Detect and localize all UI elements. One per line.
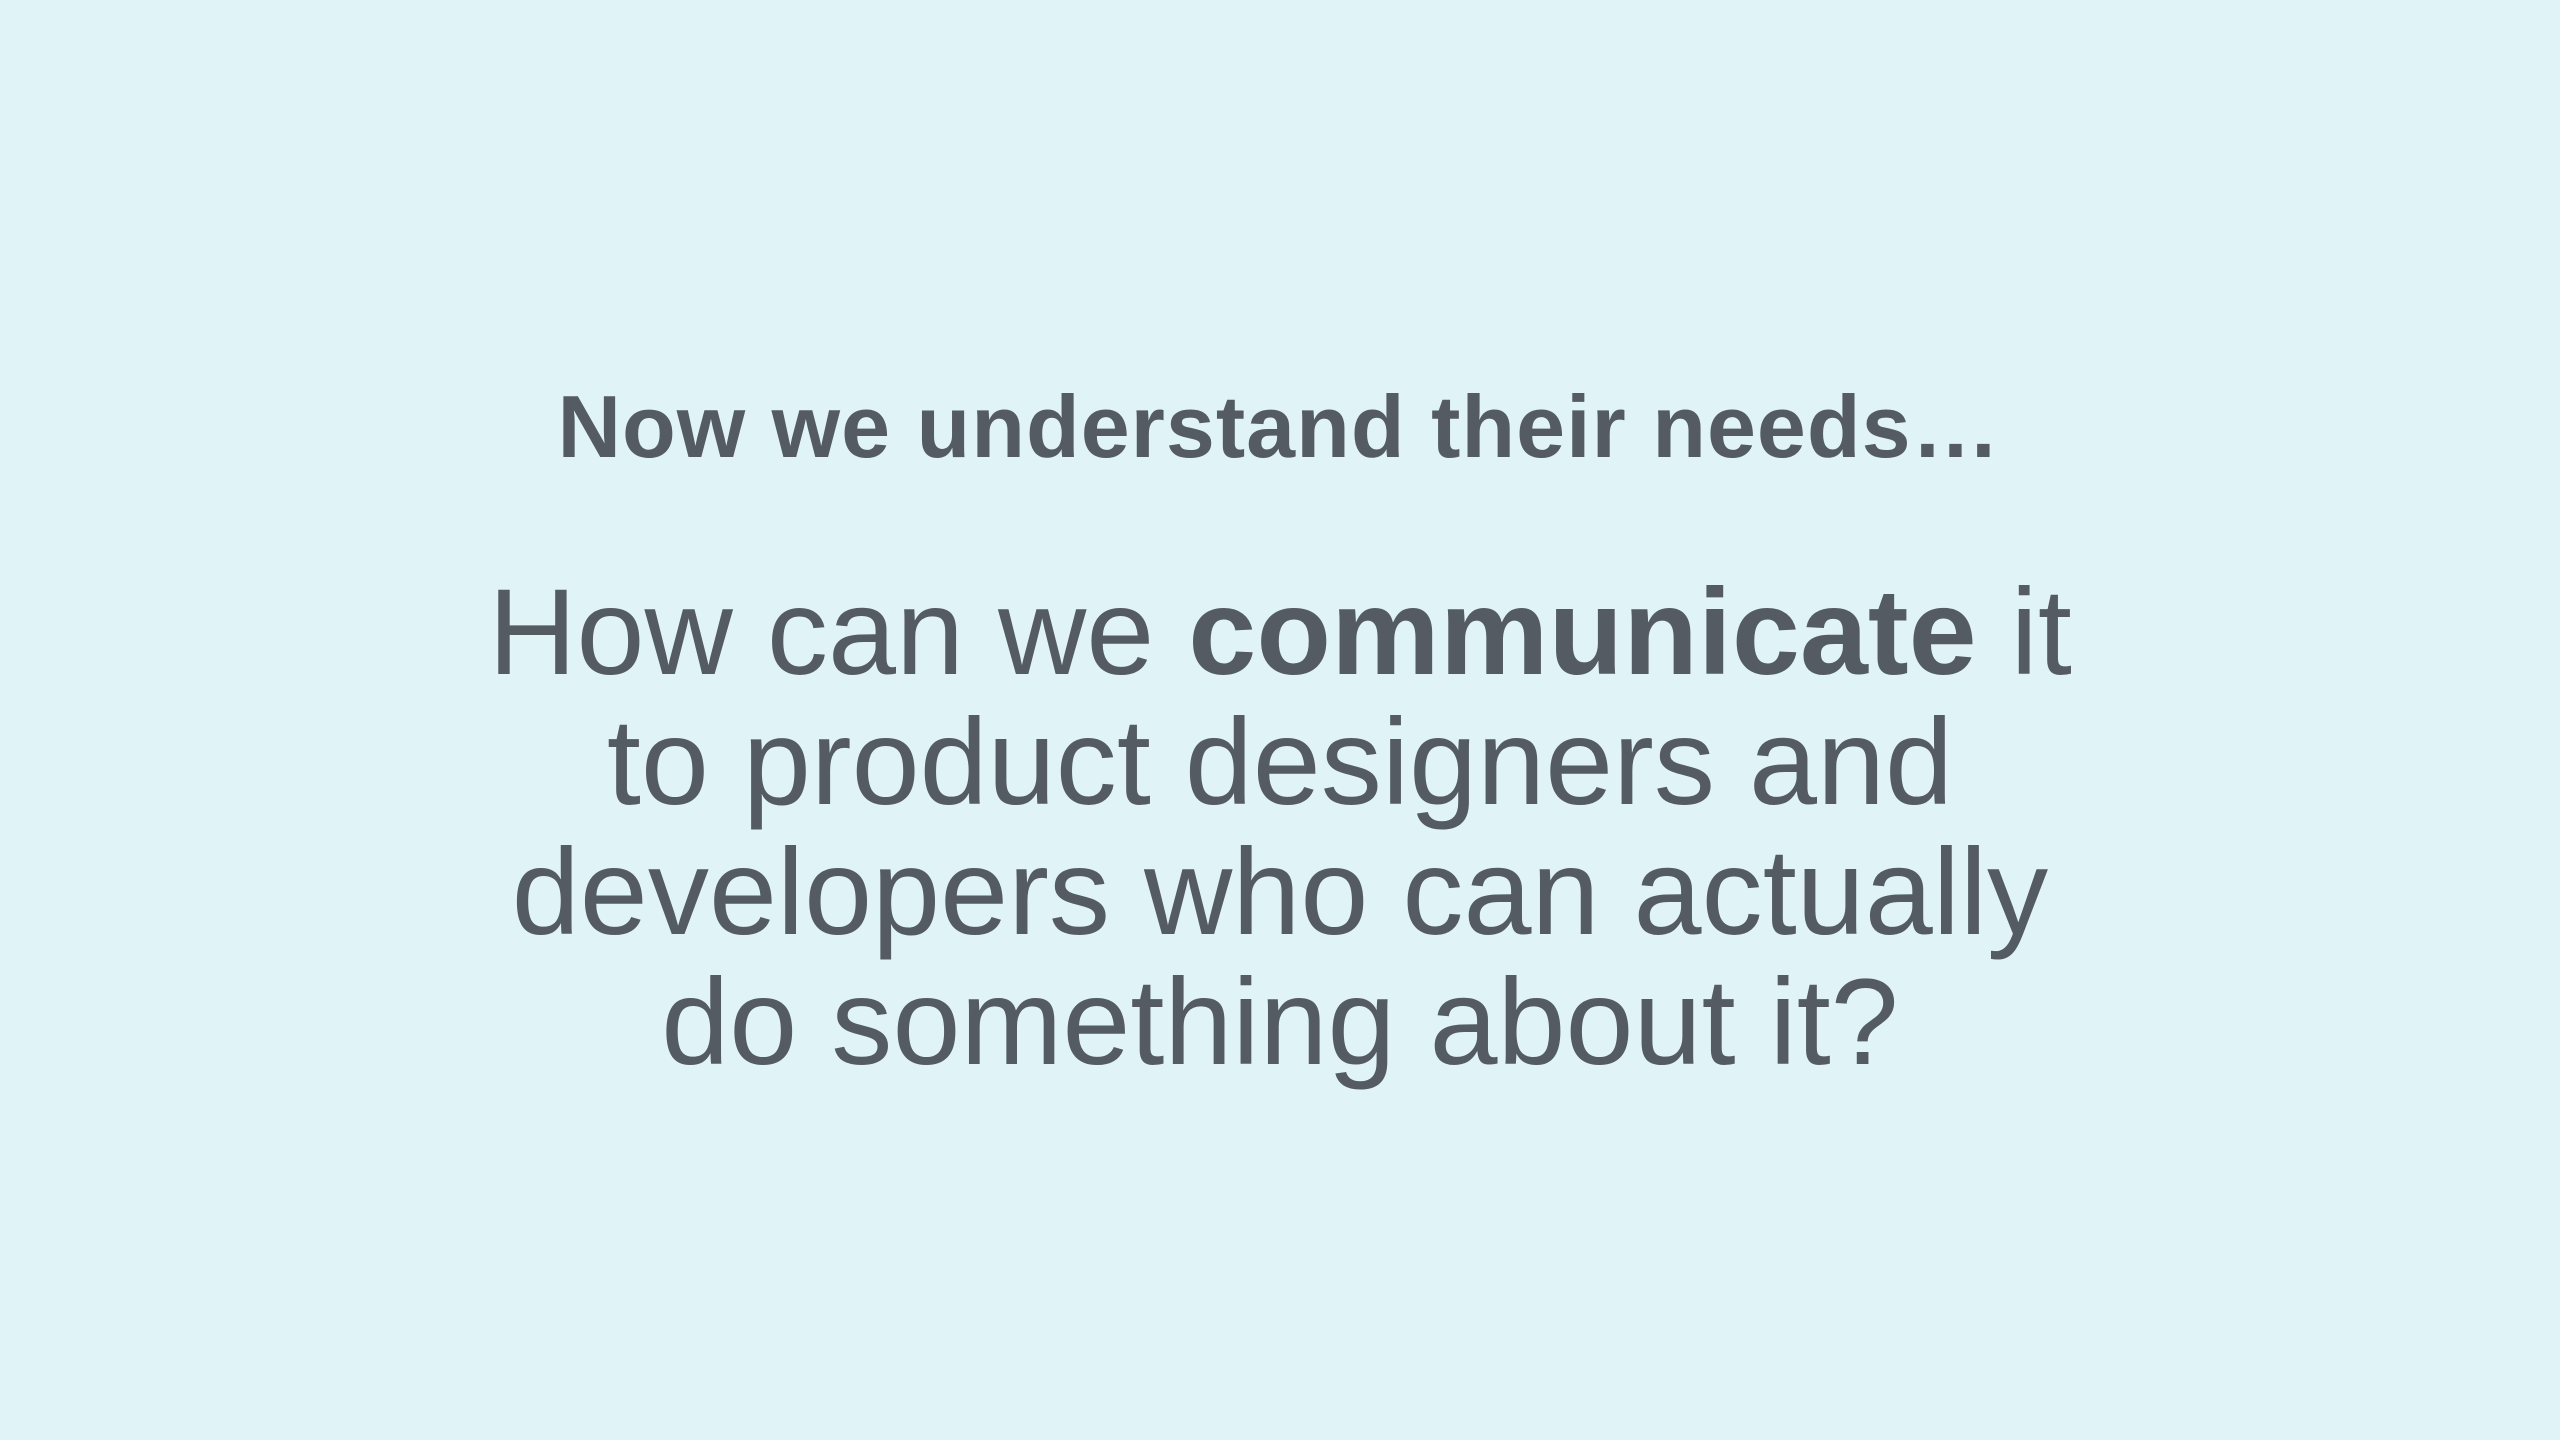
question line 2: to product designers and [607,693,1953,830]
heading: lead-in sentence: Now we understand their needs… [557,377,2001,476]
question line 4: do something about it? [661,953,1899,1090]
question line 1: How can we communicate it [488,563,2072,700]
question line 3: developers who can actually [512,823,2048,960]
text block: main question [488,563,2072,1090]
